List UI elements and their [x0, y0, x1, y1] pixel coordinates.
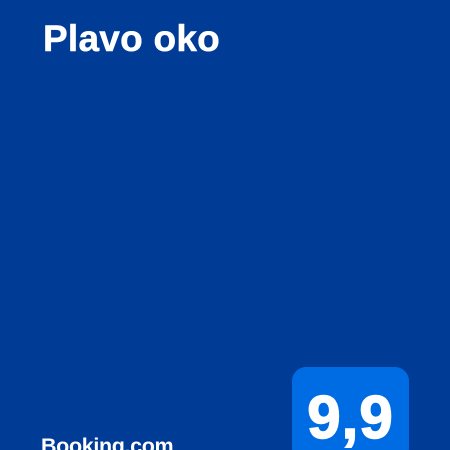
score badge [292, 367, 409, 450]
score value: 9,9 [307, 384, 394, 450]
title: Plavo oko [43, 18, 220, 59]
